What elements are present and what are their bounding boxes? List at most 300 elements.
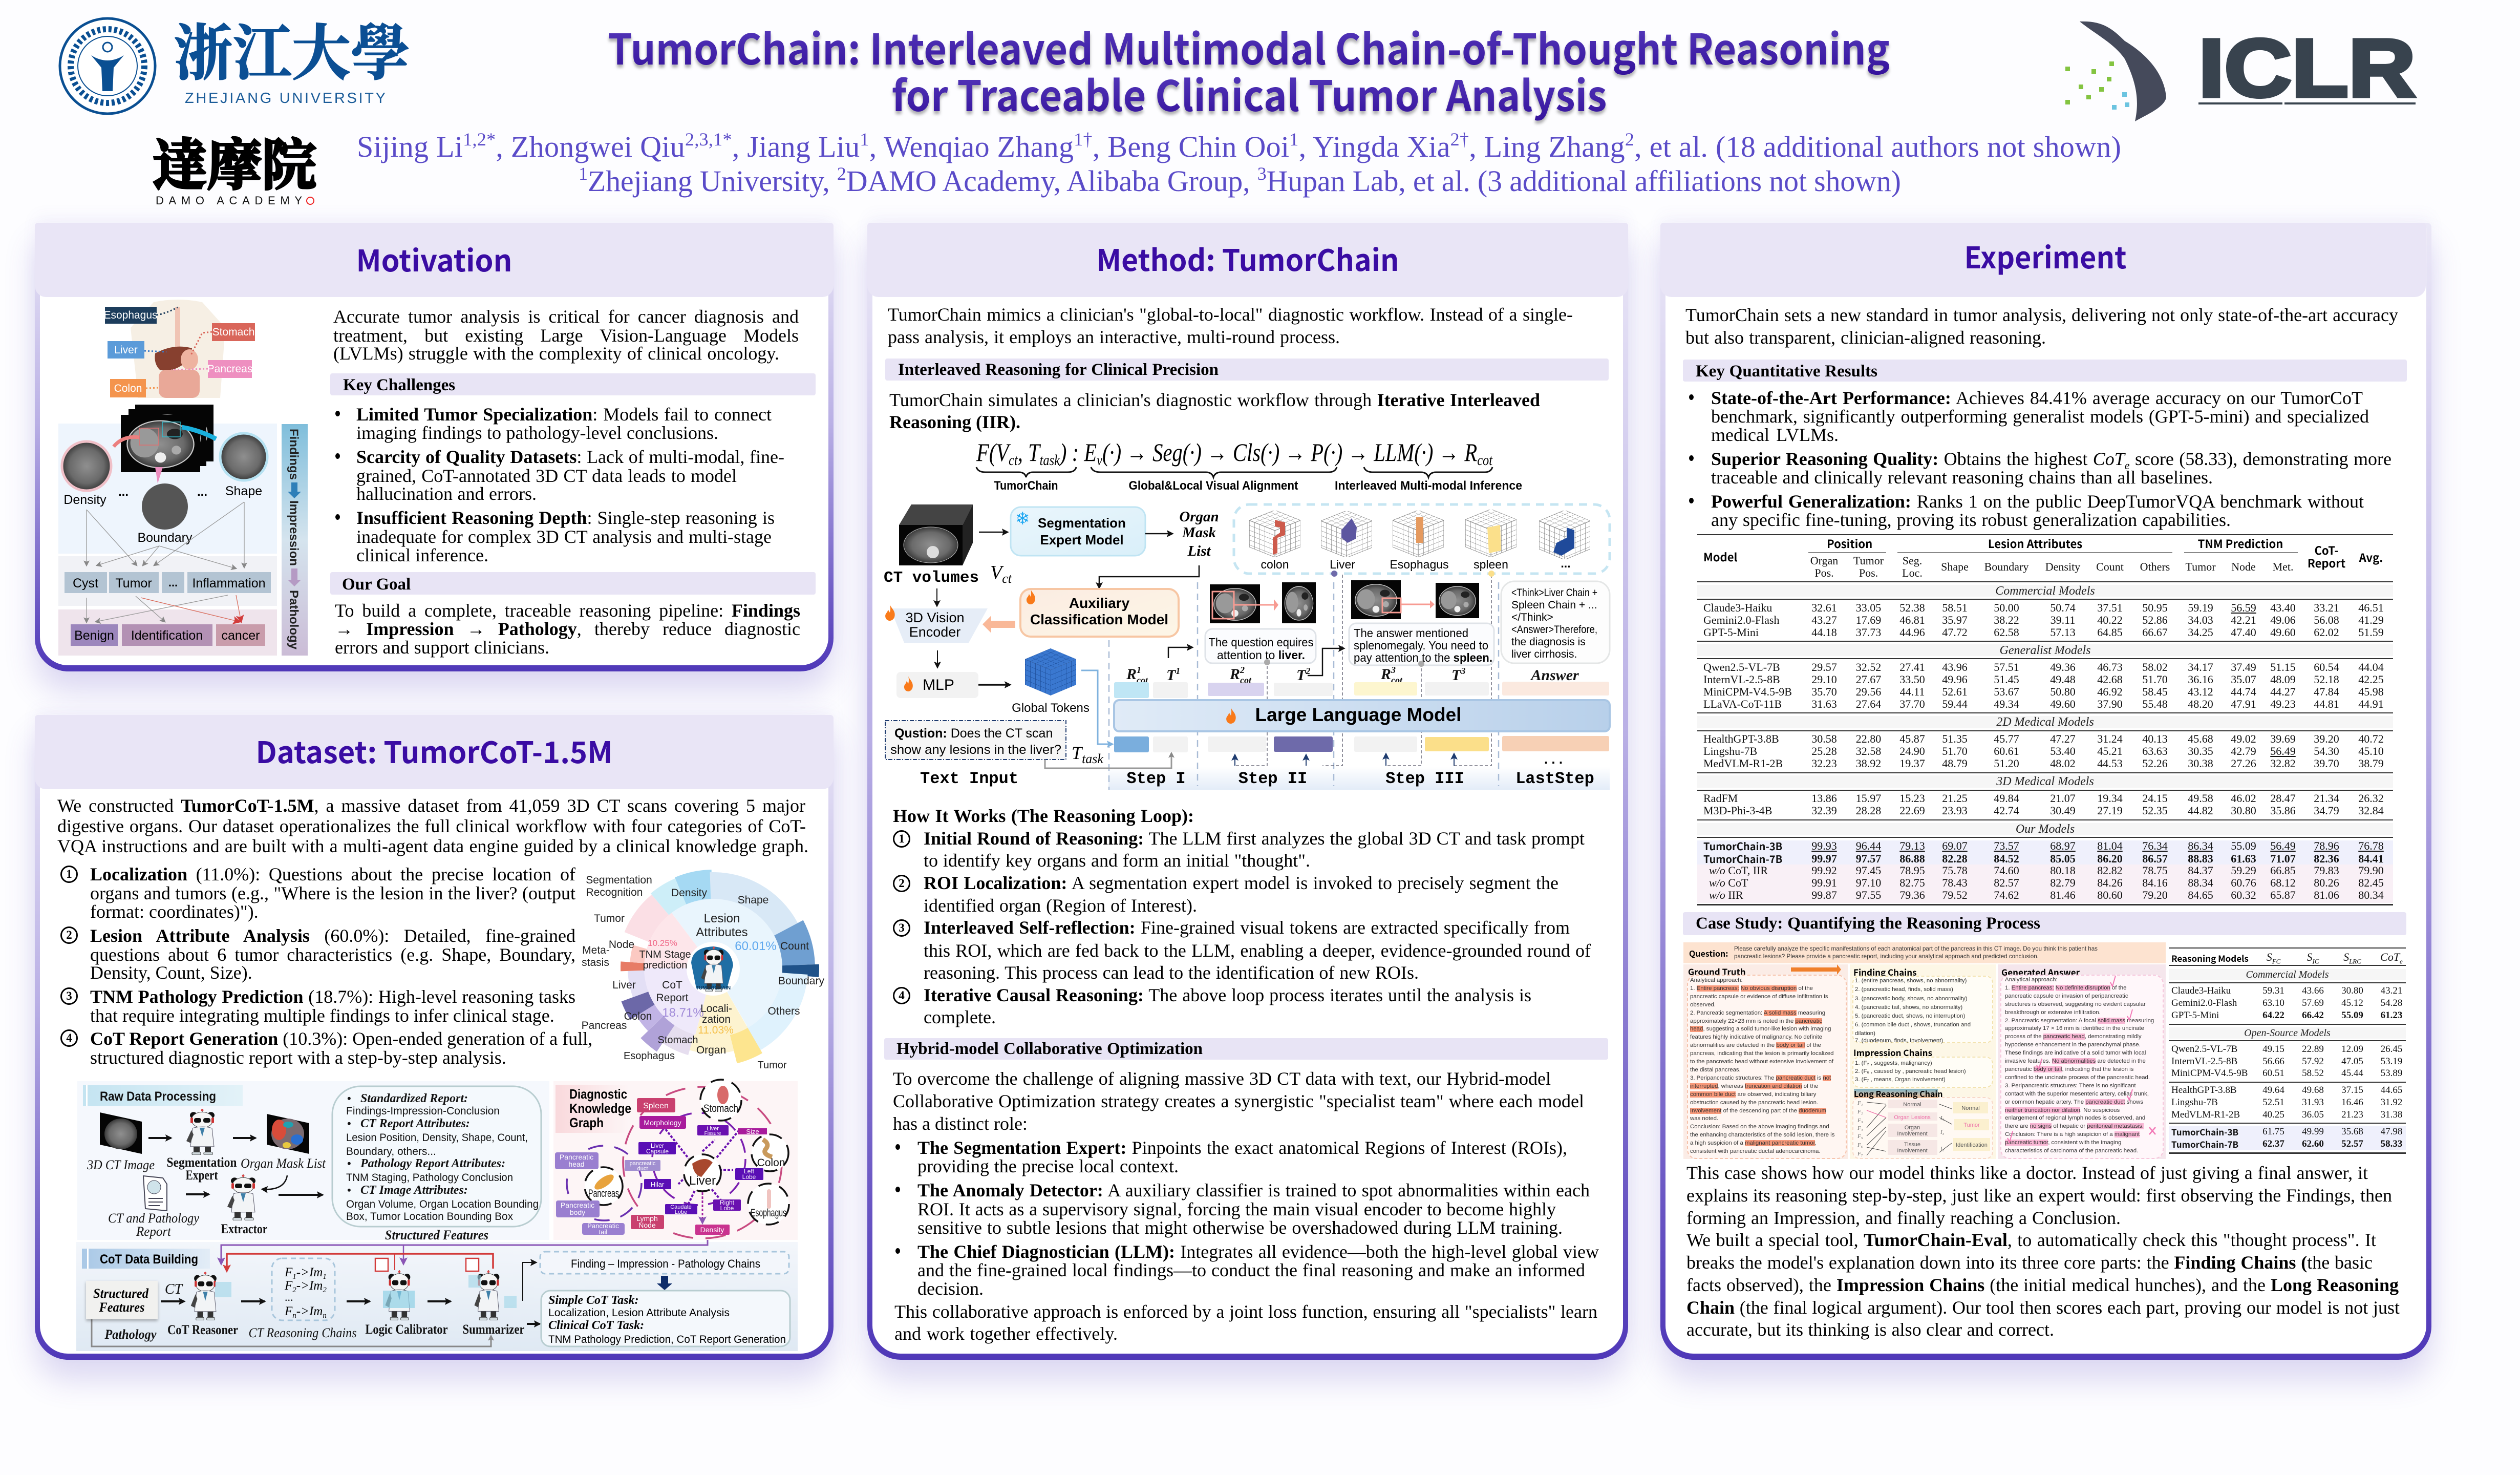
pathology boxes: Benign	[74, 628, 114, 643]
column: finding, impression, long reasoning chains: F₂	[1857, 1109, 1863, 1115]
table: main benchmark results: 21.34	[2314, 792, 2339, 805]
table: main benchmark results: Pos.	[1814, 566, 1834, 579]
table: main benchmark results: 99.97	[1811, 852, 1837, 865]
labels	[104, 1281, 525, 1342]
table: main benchmark results: Met.	[2273, 560, 2293, 573]
table: main benchmark results: 47.72	[1942, 626, 1968, 639]
list: key challenges: inadequate for complex 3D CT analysis and multi-stage	[356, 526, 772, 547]
list: How It Works: How It Works (The Reasoning Loop):	[893, 806, 1194, 826]
token labels: T	[1166, 667, 1176, 684]
token labels: 2	[1305, 666, 1310, 676]
table: main benchmark results: 37.73	[1856, 626, 1881, 639]
table: main benchmark results: TNM Prediction	[2198, 535, 2283, 552]
tag: Raw Data Processing: Raw Data Processing	[100, 1089, 216, 1104]
figure: case study comparison	[1683, 942, 2166, 1159]
table: main benchmark results: 39.11	[2051, 614, 2075, 626]
card: CoT tasks: Clinical CoT Task:	[548, 1319, 644, 1332]
column: finding, impression, long reasoning chains: 4. (pancreatic tail, shows, no abnormality)	[1855, 1004, 1962, 1010]
table: main benchmark results: 76.34	[2142, 839, 2168, 852]
heading: Dataset: Dataset: TumorCoT-1.5M	[256, 729, 612, 772]
column: ground truth: 3. Peripancreatic structures: The pancreatic duct is not	[1690, 1075, 1831, 1081]
table: main benchmark results: 79.83	[2314, 864, 2339, 877]
table: main benchmark results: 34.25	[2188, 626, 2213, 639]
lesion attribute crops: ...	[197, 485, 207, 499]
text: case study explanation: breaks the model's explanation down into its three core parts: the Finding Chains (the basic	[1686, 1252, 2373, 1273]
table: main benchmark results: 48.20	[2188, 698, 2213, 710]
column: generated answer: hypodense enhancement in the parenchymal phase.	[2005, 1042, 2141, 1048]
column: ground truth: consistent with pancreatic ductal adenocarcinoma.	[1690, 1148, 1821, 1154]
table: main benchmark results: 44.27	[2270, 685, 2296, 698]
card: structured report attributes: CT Image Attributes:	[360, 1184, 468, 1197]
table: main benchmark results: 15.97	[1856, 792, 1881, 805]
table: main benchmark results: Boundary	[1984, 560, 2028, 573]
column: generated answer: Analytical approach:	[2005, 977, 2058, 983]
column: generated answer: Generated Answer	[2001, 965, 2080, 978]
attribute nodes: Liver	[707, 1126, 719, 1132]
text: case study explanation	[1686, 1164, 2400, 1339]
column: generated answer: contact with the superior mesenteric artery, celiac trunk,	[2005, 1091, 2149, 1097]
column: finding, impression, long reasoning chains: Tissue	[1904, 1142, 1920, 1148]
input tokens: . . .	[1544, 751, 1563, 767]
table: main benchmark results: 82.45	[2358, 876, 2384, 889]
table: main benchmark results: 37.90	[2097, 698, 2123, 710]
card: reasoning chains: n	[323, 1312, 327, 1320]
column: generated answer: invasive features. No abnormalities are detected in the	[2005, 1058, 2146, 1064]
authors and affiliations: , et al. (18 additional authors not shown)	[1634, 130, 2121, 163]
list: How It Works: Interleaved Self-reflection: Fine-grained visual tokens are extracted specifically from	[924, 917, 1570, 938]
column: ground truth: the distal pancreas.	[1690, 1067, 1741, 1073]
authors and affiliations: 1	[579, 163, 588, 184]
subheading: Interleaved Reasoning	[885, 359, 1609, 381]
Large Language Model	[1114, 700, 1610, 731]
chart: dataset sunburst donut: Node	[609, 939, 634, 951]
column: generated answer: breakthrough or extensive infiltration.	[2005, 1009, 2101, 1016]
organ mask list label: Mask	[1182, 524, 1216, 541]
token labels: 3	[1460, 666, 1465, 676]
logo: DAMO Academy: DAMO ACADEMY	[156, 194, 302, 207]
list: key results: State-of-the-Art Performance: Achieves 84.41% average accuracy on our TumorCoT	[1711, 388, 2363, 408]
column: ground truth: head, suggesting a solid tumor-like lesion with imaging	[1690, 1026, 1831, 1032]
table: main benchmark results: 73.57	[1994, 839, 2019, 852]
card: reasoning chains: ->Im	[296, 1304, 323, 1318]
authors and affiliations: 2†	[1450, 129, 1469, 150]
table: reasoning quality scores: 49.64	[2262, 1085, 2284, 1095]
column: generated answer: 2. Pancreatic segmentation: A focal solid mass measuring	[2005, 1018, 2154, 1024]
table: main benchmark results: 24.15	[2142, 792, 2168, 805]
column: finding, impression, long reasoning chains: Involvement	[1897, 1148, 1928, 1154]
text: dataset intro	[57, 795, 808, 856]
table: main benchmark results: Qwen2.5-VL-7B	[1703, 661, 1780, 673]
authors and affiliations: , Beng Chin Ooi	[1093, 130, 1289, 163]
impression boxes	[65, 572, 271, 593]
column: finding, impression, long reasoning chains: I₃	[1940, 1129, 1945, 1135]
card: structured report attributes: Standardized Report:	[360, 1092, 468, 1105]
table: main benchmark results: 58.45	[2142, 685, 2168, 698]
table: main benchmark results: 40.72	[2358, 732, 2384, 745]
logo: Zhejiang University: ZHEJIANG UNIVERSITY	[185, 90, 386, 107]
table: main benchmark results: 42.74	[1994, 804, 2019, 817]
table: reasoning quality scores: 26.45	[2381, 1044, 2402, 1055]
authors and affiliations: 3	[1257, 163, 1267, 184]
column: generated answer	[1998, 964, 2166, 1159]
table: main benchmark results: 35.86	[2270, 804, 2296, 817]
table: main benchmark results: 24.90	[1899, 745, 1925, 757]
card: structured features	[86, 1281, 158, 1319]
list: four task categories: TNM Pathology Prediction (18.7%): High-level reasoning tasks	[90, 986, 575, 1007]
table: reasoning quality scores: SLRC	[2343, 951, 2361, 965]
column: finding, impression, long reasoning chains: Finding Chains	[1853, 965, 1917, 978]
table: reasoning quality scores: 58.33	[2381, 1139, 2402, 1149]
card: structured report attributes: Pathology Report Attributes:	[360, 1157, 505, 1170]
text: our goal: → Impression → Pathology, thereby reduce diagnostic	[335, 619, 800, 639]
text: our goal: errors and support clinicians.	[335, 637, 549, 658]
diagram: TumorChain architecture	[881, 499, 1613, 794]
table: main benchmark results: 46.51	[2358, 601, 2384, 614]
column: finding, impression, long reasoning chains: 1. (F₂ , suggests, malignancy)	[1855, 1060, 1932, 1066]
organ mask list label: Organ	[1179, 509, 1219, 525]
attribute nodes: Liver	[651, 1142, 664, 1149]
table: main benchmark results: 88.83	[2188, 852, 2213, 865]
table: main benchmark results: 49.06	[2270, 614, 2296, 626]
figure: Diagnostic Knowledge Graph: Pancreas	[588, 1188, 619, 1199]
table: reasoning quality scores: 63.10	[2262, 998, 2284, 1008]
table: main benchmark results: 45.87	[1899, 732, 1925, 745]
table: main benchmark results: 76.78	[2358, 839, 2384, 852]
feedback lines	[92, 1240, 708, 1346]
text: hybrid-model description: and work together effectively.	[894, 1323, 1118, 1344]
authors and affiliations: 1	[860, 129, 869, 150]
table: main benchmark results: 97.45	[1856, 864, 1881, 877]
table: main benchmark results: 68.12	[2270, 876, 2296, 889]
icon: segmentation expert panda	[186, 1109, 215, 1155]
lesion attribute crops: Shape	[225, 484, 262, 498]
table: main benchmark results: 45.10	[2358, 745, 2384, 757]
table: main benchmark results: 49.23	[2270, 698, 2296, 710]
table: main benchmark results: 39.20	[2314, 732, 2339, 745]
table: main benchmark results: 80.18	[2050, 864, 2076, 877]
chart: dataset sunburst donut: Esophagus	[624, 1050, 675, 1062]
column: generated answer: pancreatic body or tail, indicating that the lesion is	[2005, 1066, 2133, 1072]
table: reasoning quality scores: Claude3-Haiku	[2171, 985, 2231, 996]
table: main benchmark results: 44.18	[1811, 626, 1837, 639]
column: ground truth: approximately 22×23 mm is noted in the pancreatic	[1690, 1018, 1822, 1024]
title: TumorChain: Interleaved Multimodal Chain-of-Thought Reasoning	[608, 16, 1890, 77]
text: hybrid-model description: The Chief Diagnostician (LLM): Integrates all evidence—both the high-level global view	[917, 1241, 1599, 1262]
table: main benchmark results: 42.25	[2358, 673, 2384, 686]
table: main benchmark results	[1697, 535, 2393, 905]
table: main benchmark results: 80.26	[2314, 876, 2339, 889]
text: IIR description	[889, 391, 1540, 432]
table: main benchmark results: 48.02	[2050, 757, 2076, 770]
table: main benchmark results: 97.10	[1856, 876, 1881, 889]
Large Language Model: Large Language Model	[1255, 704, 1461, 725]
background tiers	[58, 424, 277, 656]
table: reasoning quality scores: 52.57	[2341, 1139, 2363, 1149]
column: ground truth: to the pancreatic head without extensive involvement of	[1690, 1059, 1833, 1065]
text: hybrid-model description: This collaborative approach is enforced by a joint loss function, ensuring all "specialists" learn	[894, 1301, 1597, 1322]
column: generated answer: confined to the uncinate process of the pancreatic head.	[2005, 1074, 2150, 1081]
text: our goal: To build a complete, traceable reasoning pipeline: Findings	[335, 600, 800, 621]
list: key challenges: grained, CoT-annotated 3D CT data leads to model	[356, 466, 737, 486]
list: key challenges: Insufficient Reasoning Depth: Single-step reasoning is	[356, 508, 775, 528]
table: main benchmark results: 56.59	[2231, 601, 2256, 614]
formula: task	[1040, 452, 1060, 469]
heading: Experiment: Experiment	[1964, 234, 2127, 277]
attribute nodes: Pancreatic	[587, 1222, 619, 1230]
table: reasoning quality scores: SFC	[2267, 951, 2280, 965]
list: key challenges: Scarcity of Quality Datasets: Lack of multi-modal, fine-	[356, 447, 784, 467]
table: main benchmark results: 44.11	[1900, 685, 1925, 698]
question band: pancreatic lesions? Please provide a pancreatic report, including your analytical approach and predicted conclusion.	[1734, 953, 2039, 960]
chart: dataset sunburst donut: Segmentation	[586, 874, 652, 886]
text: case study explanation: Chain (the final logical argument). Our tool then scores each part, proving our model is not just	[1686, 1297, 2400, 1318]
text: case study explanation: accurate, but its thinking is also clear and correct.	[1686, 1319, 2054, 1340]
tag: Diagnostic Knowledge Graph: Diagnostic	[569, 1086, 627, 1102]
table: main benchmark results: 30.58	[1811, 732, 1837, 745]
table: main benchmark results: 78.95	[1899, 864, 1925, 877]
anatomy illustration: Liver	[114, 344, 138, 356]
table: main benchmark results: 22.69	[1899, 804, 1925, 817]
black arrows	[937, 532, 1344, 685]
icon: summarizer panda	[468, 1270, 517, 1320]
labels: Expert	[185, 1168, 218, 1183]
authors and affiliations: 2	[1625, 129, 1634, 150]
labels	[87, 1155, 488, 1242]
formula: ct	[1009, 452, 1018, 469]
table: main benchmark results: 51.70	[2142, 673, 2168, 686]
column: ground truth: 1. Entire pancreas: No obvious disruption of the	[1690, 985, 1813, 992]
column: finding, impression, long reasoning chains: dilation)	[1855, 1030, 1875, 1037]
subheading: Key Quantitative Results: Key Quantitative Results	[1696, 362, 1877, 381]
table: main benchmark results: 81.46	[2050, 889, 2076, 901]
3D Vision Encoder: 3D Vision	[905, 610, 965, 625]
findings bar: Pathology	[287, 590, 301, 650]
table: main benchmark results: 43.40	[2270, 601, 2296, 614]
token labels: R	[1230, 666, 1240, 683]
table: main benchmark results: 81.06	[2314, 889, 2339, 901]
organ mask list	[1234, 504, 1610, 577]
labels: Pathology	[104, 1327, 157, 1342]
column: ground truth	[1683, 964, 1848, 1159]
organ mask list: Esophagus	[1390, 558, 1449, 571]
table: main benchmark results: 82.28	[1942, 852, 1968, 865]
table: main benchmark results: Model	[1703, 549, 1737, 565]
table: main benchmark results: 28.47	[2270, 792, 2296, 805]
column: ground truth: interrupted, whereas truncation and dilation of the	[1690, 1083, 1818, 1089]
column: finding, impression, long reasoning chains: Long Reasoning Chain	[1854, 1087, 1943, 1100]
table: main benchmark results: Commercial Models	[1995, 584, 2095, 598]
chart: dataset sunburst donut: Pancreas	[582, 1020, 627, 1031]
table: main benchmark results: 19.37	[1899, 757, 1925, 770]
step band	[1108, 767, 1610, 790]
table: reasoning quality scores: TumorChain-7B	[2171, 1137, 2238, 1150]
table: main benchmark results: 43.12	[2188, 685, 2213, 698]
icon: logic calibrator panda	[383, 1270, 415, 1320]
token labels	[1126, 665, 1579, 685]
3D Vision Encoder: Encoder	[909, 624, 960, 640]
formula: Interleaved Multi-modal Inference	[1335, 479, 1522, 493]
table: main benchmark results: 82.75	[1899, 876, 1925, 889]
table: main benchmark results: 74.62	[1994, 889, 2019, 901]
list: four task categories: format: coordinates)").	[90, 901, 259, 922]
column: finding, impression, long reasoning chains: F₁	[1857, 1100, 1863, 1106]
table: main benchmark results: 52.38	[1899, 601, 1925, 614]
chart: dataset sunburst donut: Count	[780, 940, 809, 952]
CT volume	[884, 504, 1012, 587]
table: main benchmark results: 36.16	[2188, 673, 2213, 686]
list: How It Works: to identify key organs and form an initial "thought".	[924, 850, 1310, 871]
text: dataset intro: VQA instructions and are built with a multi-agent data engine guided by a clinical knowledge graph.	[57, 836, 808, 856]
table: main benchmark results: 32.39	[1811, 804, 1837, 817]
list: How It Works: 3	[899, 921, 905, 934]
table: main benchmark results: Lesion Attributes	[1988, 535, 2082, 552]
card: CoT tasks: Localization, Lesion Attribute Analysis	[548, 1307, 730, 1319]
list: key challenges: clinical inference.	[356, 545, 488, 565]
callouts: </Think>	[1511, 612, 1553, 623]
table: main benchmark results: 57.13	[2050, 626, 2076, 639]
chart: dataset sunburst donut: zation	[702, 1014, 731, 1025]
table: main benchmark results: 84.52	[1994, 852, 2019, 865]
step dividers	[1109, 582, 1499, 790]
attribute nodes: Pancreatic	[560, 1153, 593, 1161]
table: main benchmark results: 86.34	[2188, 839, 2213, 852]
text: motivation intro: Accurate tumor analysis is critical for cancer diagnosis and	[333, 306, 799, 327]
attribute nodes: Lobe	[720, 1205, 734, 1212]
table: main benchmark results: 58.51	[1942, 601, 1968, 614]
authors and affiliations: DAMO Academy, Alibaba Group,	[846, 164, 1257, 198]
column: ground truth: a high suspicion of a malignant pancreatic tumor,	[1690, 1140, 1817, 1146]
table: reasoning quality scores: 43.21	[2381, 985, 2402, 996]
table: main benchmark results: 60.76	[2231, 876, 2256, 889]
labels: Segmentation	[167, 1155, 237, 1170]
list: How It Works	[893, 807, 1594, 1027]
column: generated answer: approximately 17 × 16 mm is identified in the uncinate	[2005, 1025, 2144, 1031]
column: generated answer: neither truncation nor dilation. No suspicious	[2005, 1107, 2120, 1113]
table: main benchmark results: 40.22	[2097, 614, 2123, 626]
table: main benchmark results: 27.26	[2231, 757, 2256, 770]
list: key results: medical LVLMs.	[1711, 425, 1839, 445]
table: main benchmark results: 47.40	[2231, 626, 2256, 639]
table: main benchmark results: MedVLM-R1-2B	[1703, 757, 1783, 770]
subheading: Our Goal: Our Goal	[342, 575, 411, 594]
list: four task categories: Lesion Attribute Analysis (60.0%): Detailed, fine-grained	[90, 925, 575, 946]
table: reasoning quality scores: 53.19	[2381, 1056, 2402, 1067]
table: reasoning quality scores: 47.05	[2341, 1056, 2363, 1067]
card: CoT tasks: Simple CoT Task:	[548, 1294, 638, 1307]
table: main benchmark results: 45.77	[1994, 732, 2019, 745]
callouts: the diagnosis is	[1511, 636, 1586, 648]
header: logos and title	[58, 5, 2418, 207]
table: main benchmark results: 60.61	[1994, 745, 2019, 757]
table: reasoning quality scores: 66.42	[2302, 1010, 2324, 1021]
formula: Global&Local Visual Alignment	[1128, 479, 1298, 493]
small arrows	[1235, 754, 1454, 766]
table: main benchmark results: 43.96	[1942, 661, 1968, 673]
table: reasoning quality scores: 57.92	[2302, 1056, 2324, 1067]
column: finding, impression, long reasoning chains: F₄	[1857, 1125, 1863, 1131]
table: main benchmark results: RadFM	[1703, 792, 1738, 805]
table: main benchmark results: 61.63	[2231, 852, 2256, 865]
table: main benchmark results: 96.44	[1856, 839, 1881, 852]
table: main benchmark results: M3D-Phi-3-4B	[1703, 804, 1772, 817]
auxiliary classification model: Classification Model	[1030, 612, 1168, 627]
list: key challenges: Limited Tumor Specialization: Models fail to connect	[356, 404, 772, 425]
table: main benchmark results: 55.48	[2142, 698, 2168, 710]
table: main benchmark results: GPT-5-Mini	[1703, 626, 1759, 639]
table: main benchmark results: 99.91	[1811, 876, 1837, 889]
table: main benchmark results: 51.70	[1942, 745, 1968, 757]
card: structured report attributes: •	[347, 1117, 351, 1130]
table: main benchmark results: 17.69	[1856, 614, 1881, 626]
authors and affiliations: 2,3,1*	[685, 129, 732, 150]
table: reasoning quality scores: HealthGPT-3.8B	[2171, 1085, 2237, 1095]
table: main benchmark results: 51.59	[2358, 626, 2384, 639]
text: hybrid-model description: ROI. It acts as a supervisory signal, forcing the main visual encoder to become highly	[917, 1199, 1556, 1219]
table: main benchmark results: 50.74	[2050, 601, 2076, 614]
tag: Raw Data Processing	[83, 1085, 243, 1106]
table: main benchmark results: 79.90	[2358, 864, 2384, 877]
table: main benchmark results: 27.19	[2097, 804, 2123, 817]
table: reasoning quality scores: 62.60	[2302, 1139, 2324, 1149]
column: generated answer: structures is observed, suggesting no evident capsular	[2005, 1001, 2146, 1007]
chart: dataset sunburst donut: Lesion	[704, 912, 740, 925]
column: finding, impression, long reasoning chains: 1. (entire pancreas, shows, no abnormality)	[1855, 978, 1967, 984]
chart: dataset sunburst donut: Locali-	[700, 1003, 732, 1015]
output tokens	[1114, 682, 1609, 698]
column: ground truth: was noted.	[1690, 1115, 1718, 1122]
column: finding, impression, long reasoning chains: Involvement	[1897, 1131, 1928, 1137]
table: main benchmark results: 57.51	[1994, 661, 2019, 673]
column: generated answer: characteristics of carcinoma of the pancreatic head.	[2005, 1148, 2138, 1154]
table: main benchmark results: 97.57	[1856, 852, 1881, 865]
list: How It Works: identified organ (Region of Interest).	[924, 895, 1197, 916]
CT volume: V	[990, 562, 1002, 583]
labels: CoT Reasoner	[167, 1322, 238, 1337]
card: structured report attributes: Lesion Position, Density, Shape, Count,	[346, 1132, 528, 1144]
table: main benchmark results: 31.24	[2097, 732, 2123, 745]
table: main benchmark results: 49.60	[2270, 626, 2296, 639]
organ mask list: colon	[1261, 558, 1289, 571]
labels: Extractor	[221, 1221, 267, 1236]
table: main benchmark results: 84.37	[2188, 864, 2213, 877]
list: How It Works: Iterative Causal Reasoning: The above loop process iterates until the analysis is	[924, 985, 1531, 1005]
question box: task	[1082, 751, 1103, 766]
table: reasoning quality scores: 49.68	[2302, 1085, 2324, 1095]
card: CoT tasks	[541, 1291, 790, 1346]
table: reasoning quality scores: 36.05	[2302, 1109, 2324, 1120]
icon: report document	[143, 1176, 167, 1211]
table: reasoning quality scores: 30.80	[2341, 985, 2363, 996]
table: reasoning quality scores: Lingshu-7B	[2171, 1097, 2218, 1108]
card: structured report attributes: •	[347, 1157, 351, 1170]
authors and affiliations: 1	[1289, 129, 1298, 150]
table: main benchmark results: 31.63	[1811, 698, 1837, 710]
subheading: Case Study	[1683, 912, 2406, 935]
table: reasoning quality scores: 61.75	[2262, 1126, 2284, 1137]
table: main benchmark results: 60.54	[2314, 661, 2339, 673]
table: main benchmark results: 97.55	[1856, 889, 1881, 901]
table: reasoning quality scores: 64.22	[2262, 1010, 2284, 1021]
segmentation expert model: Expert Model	[1040, 532, 1124, 547]
formula: TumorChain	[994, 479, 1058, 493]
step labels: Step I	[1126, 769, 1186, 788]
labels: CT	[165, 1281, 184, 1297]
figure: Raw Data Processing	[77, 1081, 549, 1241]
figure: CoT Data Building	[76, 1240, 798, 1351]
table: reasoning quality scores: InternVL-2.5-8B	[2171, 1056, 2237, 1067]
card: reasoning chains: ->Im	[296, 1266, 323, 1279]
impression boxes: Cyst	[73, 576, 98, 591]
